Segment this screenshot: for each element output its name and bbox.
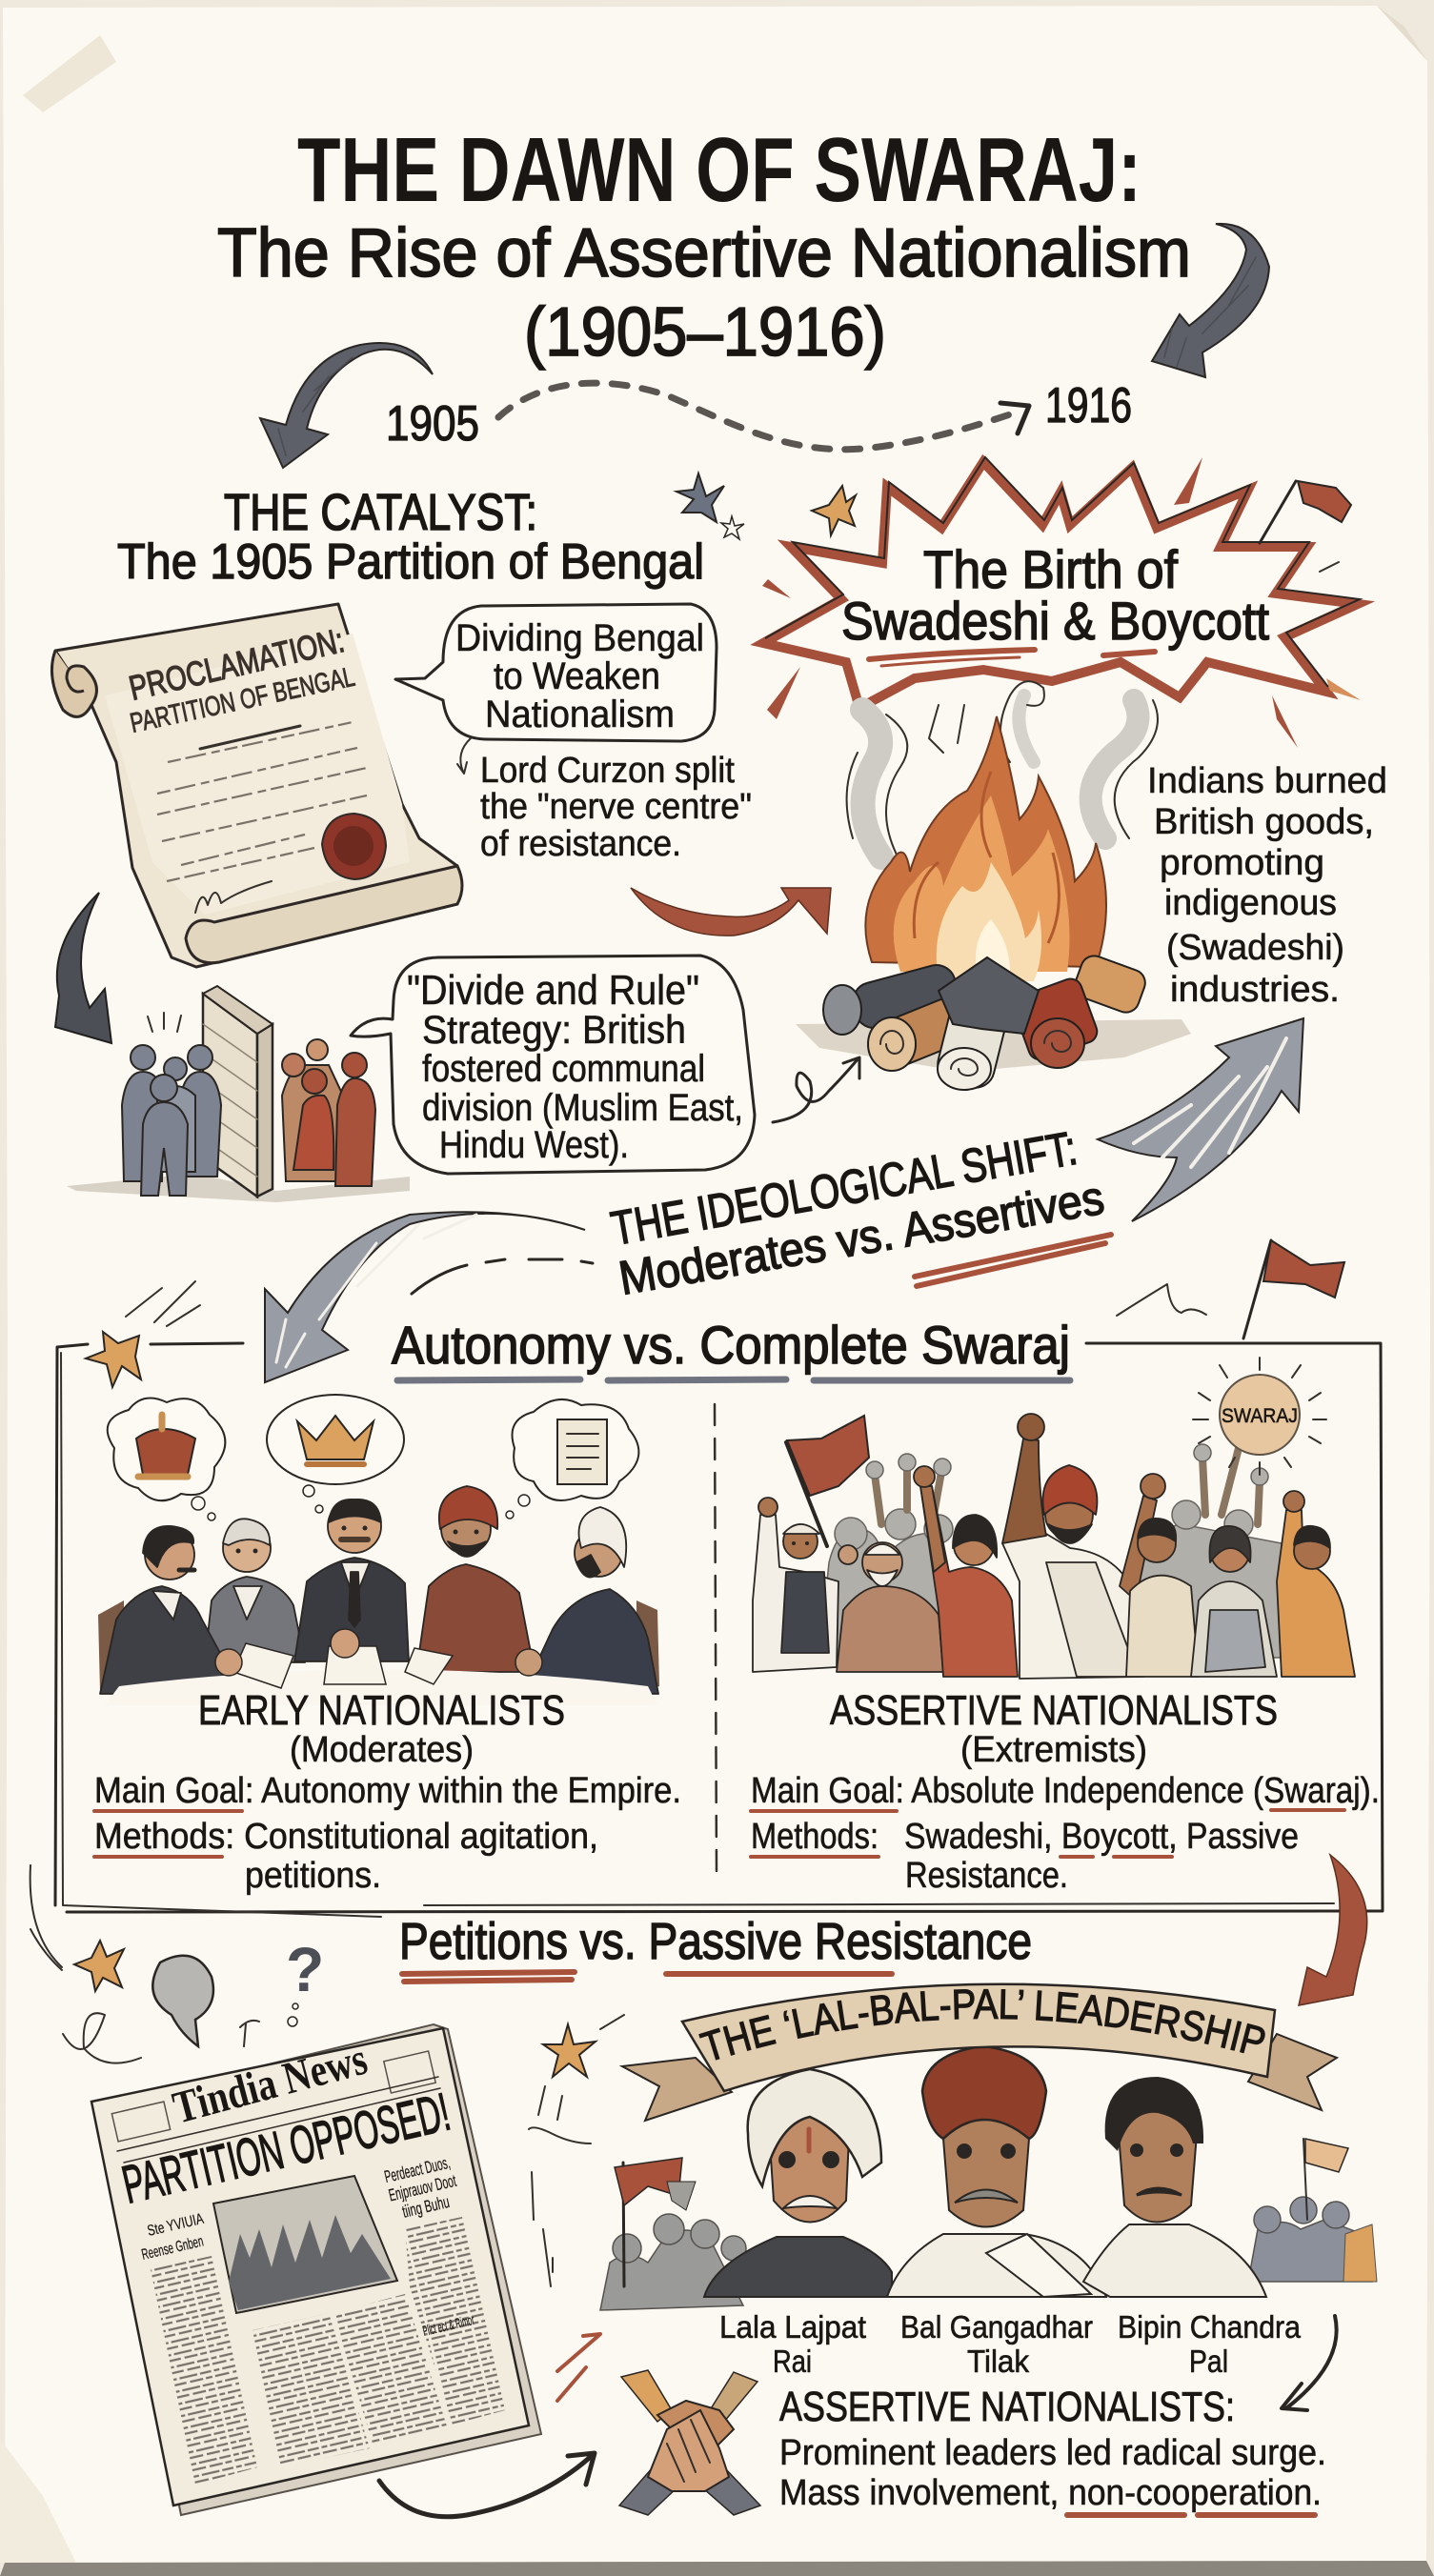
column: assertive nationalists: Swadeshi, Boycott, Passive	[904, 1817, 1299, 1857]
comparison panel	[55, 1240, 1383, 1917]
callout: divide and rule	[351, 956, 755, 1174]
text: indians burned	[1147, 761, 1387, 1010]
callout: divide and rule: fostered communal	[422, 1048, 705, 1090]
name: bal gangadhar tilak: Bal Gangadhar	[900, 2309, 1093, 2345]
smoke	[847, 681, 1158, 862]
flag on burst	[1260, 481, 1351, 543]
leader names	[719, 2309, 1302, 2379]
newspaper columns	[151, 2217, 505, 2485]
text: indians burned: indigenous	[1164, 883, 1337, 923]
newspaper headline: PARTITION OPPOSED!	[117, 2082, 455, 2215]
text: indians burned: Indians burned	[1147, 761, 1387, 801]
flag	[1117, 1240, 1344, 1338]
column: early nationalists: Main Goal: Autonomy within the Empire.	[94, 1771, 681, 1811]
assertives crowd illustration	[753, 1414, 1355, 1679]
summary: assertive nationalists: Prominent leaders led radical surge.	[779, 2433, 1326, 2473]
squiggle arrow to bonfire	[773, 1057, 859, 1122]
arrow: scroll to division	[55, 893, 111, 1043]
wax seal	[322, 814, 386, 879]
banner: lal bal pal leadership	[619, 1983, 1340, 2123]
column: assertive nationalists	[751, 1687, 1380, 1896]
text: lord curzon: of resistance.	[480, 824, 681, 864]
heading: the catalyst	[117, 484, 704, 590]
column: early nationalists: Methods: Constitutional agitation,	[94, 1817, 598, 1857]
burst: birth of swadeshi and boycott: Swadeshi & Boycott	[841, 591, 1269, 651]
woman white sari	[1191, 1526, 1277, 1677]
newspaper: Reense Gnben	[140, 2233, 205, 2264]
wall	[203, 986, 273, 1197]
grey group	[122, 1045, 221, 1196]
column: early nationalists	[94, 1687, 681, 1896]
scroll: proclamation: PARTITION OF BENGAL	[128, 662, 357, 739]
name: bipin chandra pal: Bipin Chandra	[1118, 2309, 1302, 2345]
woman red sari	[914, 1466, 1018, 1677]
background crowd	[819, 1444, 1282, 1658]
title: THE DAWN OF SWARAJ:	[297, 119, 1141, 221]
year 1905: 1905	[386, 396, 479, 452]
burst: birth of swadeshi and boycott	[762, 457, 1361, 748]
timeline	[386, 378, 1132, 452]
man two	[205, 1519, 305, 1662]
doodles: star, bubble, question: ?	[286, 1934, 324, 2004]
newspaper: Ste YVIUIA	[146, 2211, 206, 2240]
burst accents	[762, 457, 1361, 748]
callout: dividing bengal: Nationalism	[485, 694, 675, 735]
person left	[753, 1498, 838, 1672]
red group	[282, 1039, 375, 1186]
newspaper photo	[213, 2176, 397, 2313]
man three	[294, 1499, 409, 1661]
newspaper: Plict ect & Rimor	[421, 2312, 475, 2340]
arrow: down to comparison	[265, 1212, 593, 1382]
name: bipin chandra pal: Pal	[1189, 2344, 1228, 2379]
text: lord curzon: the "nerve centre"	[480, 787, 752, 827]
year 1916: 1916	[1045, 378, 1132, 433]
title: The Rise of Assertive Nationalism	[217, 215, 1191, 292]
newspaper	[91, 2024, 541, 2515]
callout: dividing bengal	[395, 604, 717, 741]
callout: divide and rule: Strategy: British	[422, 1007, 686, 1052]
column: assertive nationalists: Resistance.	[905, 1856, 1068, 1896]
arrow: to leadership	[1299, 1855, 1367, 2005]
title: (1905–1916)	[524, 294, 886, 371]
scroll curl bottom	[186, 866, 462, 963]
swaraj sun: SWARAJ	[1222, 1405, 1298, 1427]
newspaper side headline: Perdeact Duos,	[383, 2153, 452, 2186]
swaraj sun	[1193, 1358, 1326, 1475]
man five	[526, 1507, 658, 1694]
star and dashed doodle	[529, 2015, 624, 2286]
icon: joined hands	[619, 2370, 760, 2515]
summary: assertive nationalists	[779, 2384, 1326, 2515]
column: assertive nationalists: ASSERTIVE NATIONALISTS	[830, 1687, 1278, 1734]
name: lala lajpat rai: Lala Lajpat	[719, 2309, 866, 2345]
name: bipin chandra pal	[1118, 2309, 1302, 2379]
divider	[715, 1404, 717, 1872]
stars near catalyst	[677, 473, 856, 539]
moderates group illustration	[98, 1486, 659, 1705]
logs of rolled cloth	[796, 952, 1191, 1092]
scroll: proclamation: PROCLAMATION:	[126, 620, 348, 708]
summary: assertive nationalists: ASSERTIVE NATIONALISTS:	[779, 2384, 1235, 2430]
name: bal gangadhar tilak	[900, 2309, 1093, 2379]
red marks	[557, 2334, 600, 2401]
heading: ideological shift: Moderates vs. Assertives	[615, 1171, 1108, 1305]
old man	[837, 1542, 943, 1672]
portrait: lala lajpat rai	[704, 2069, 892, 2297]
man orange	[1277, 1491, 1355, 1677]
scroll: proclamation	[51, 604, 462, 967]
arrow: names to summary	[1282, 2316, 1337, 2410]
column: early nationalists: EARLY NATIONALISTS	[198, 1687, 565, 1734]
text: lord curzon: Lord Curzon split	[480, 751, 735, 791]
newspaper side headline: Enjprauov Doot	[387, 2171, 458, 2205]
man one	[100, 1526, 238, 1694]
scroll text lines	[157, 722, 367, 881]
newspaper side headline: tiing Buhu	[400, 2192, 451, 2222]
text: lord curzon	[457, 738, 752, 864]
scroll curl top	[51, 651, 96, 716]
text: indians burned: (Swadeshi)	[1166, 928, 1344, 968]
crowd behind leaders	[600, 2139, 1377, 2310]
text: indians burned: industries.	[1170, 970, 1340, 1010]
central man	[1002, 1414, 1165, 1679]
text: indians burned: British goods,	[1154, 802, 1374, 842]
heading: the catalyst: THE CATALYST:	[224, 484, 537, 541]
column: assertive nationalists: (Extremists)	[960, 1730, 1147, 1770]
star and dashes	[86, 1281, 200, 1387]
dashed timeline arrow	[498, 383, 1029, 450]
callout: divide and rule: division (Muslim East,	[422, 1087, 743, 1129]
callout: divide and rule: Hindu West).	[439, 1124, 629, 1166]
column: early nationalists: petitions.	[245, 1856, 381, 1896]
banner: lal bal pal leadership: THE ‘LAL-BAL-PAL’ LEADERSHIP	[698, 1989, 1265, 2061]
name: bal gangadhar tilak: Tilak	[967, 2344, 1029, 2379]
callout: dividing bengal: Dividing Bengal	[455, 617, 704, 659]
burst heading: The Birth of	[923, 539, 1178, 599]
arrow: up to bonfire	[1098, 1018, 1303, 1221]
text: indians burned: promoting	[1160, 843, 1324, 883]
title	[217, 119, 1191, 371]
callout: dividing bengal: to Weaken	[494, 655, 660, 697]
arrow: title to right	[1152, 224, 1269, 377]
column: early nationalists: (Moderates)	[290, 1730, 474, 1770]
arrow: scroll to bonfire	[631, 888, 831, 936]
arrow: title to left	[260, 343, 433, 468]
name: lala lajpat rai	[719, 2309, 866, 2379]
name: lala lajpat rai: Rai	[773, 2344, 812, 2379]
man beige	[1126, 1519, 1199, 1677]
man four	[416, 1486, 535, 1672]
heading: ideological shift: THE IDEOLOGICAL SHIFT:	[607, 1121, 1081, 1256]
decorative tape	[23, 35, 116, 112]
bonfire flames	[865, 716, 1106, 981]
divide and rule illustration	[67, 986, 410, 1202]
heading: petitions vs passive resistance: Petitions vs. Passive Resistance	[399, 1913, 1032, 1970]
arrow: newspaper to hands	[379, 2453, 595, 2517]
column: assertive nationalists: Methods:	[751, 1817, 879, 1857]
flag	[786, 1416, 869, 1546]
table papers	[105, 1629, 657, 1705]
thought bubbles	[108, 1395, 638, 1520]
newspaper masthead: Tindia News	[168, 2034, 373, 2134]
heading: autonomy vs complete swaraj: Autonomy vs. Complete Swaraj	[392, 1315, 1070, 1375]
callout: divide and rule: "Divide and Rule"	[407, 967, 699, 1014]
newspaper side headline	[383, 2152, 462, 2224]
doodles: star, bubble, question	[63, 1934, 324, 2063]
heading: the catalyst: The 1905 Partition of Bengal	[117, 534, 704, 590]
summary: assertive nationalists: Mass involvement, non-cooperation.	[779, 2473, 1322, 2513]
decorative curves left	[30, 1865, 62, 1970]
portrait: bal gangadhar tilak	[887, 2046, 1106, 2297]
portrait: bipin chandra pal	[1083, 2077, 1266, 2297]
